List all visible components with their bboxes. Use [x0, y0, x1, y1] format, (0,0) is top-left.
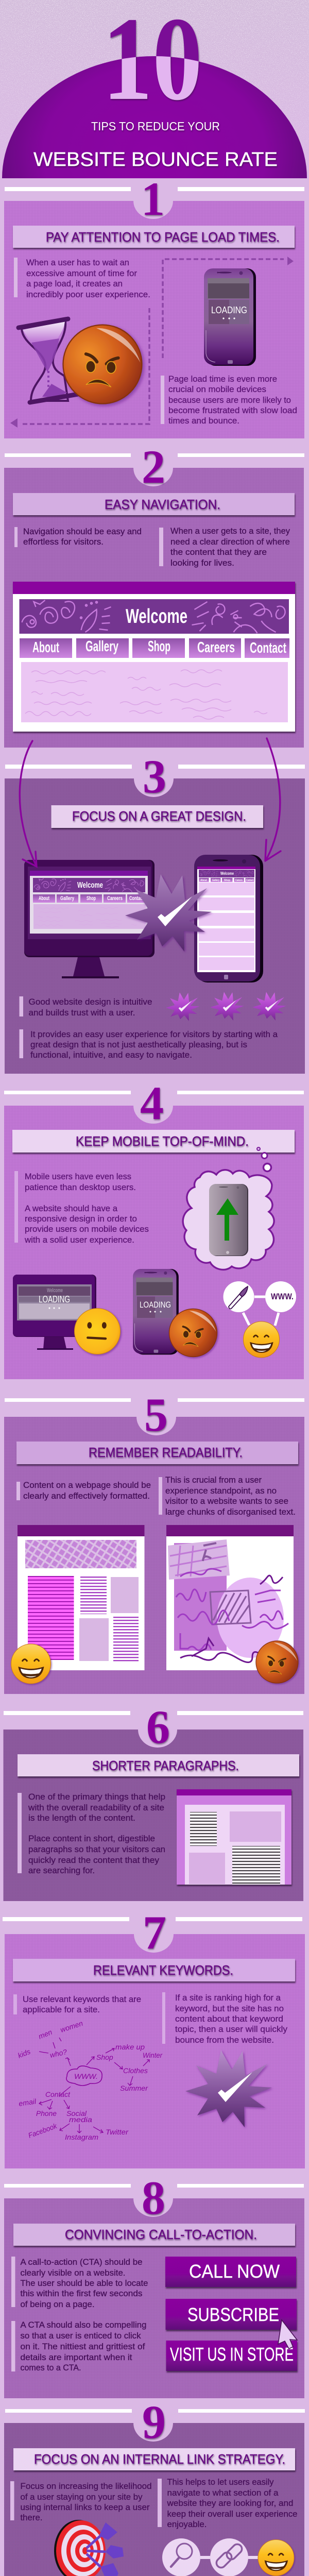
text: visible CTA: [11, 2257, 148, 2309]
text: formatting: clearly and effectively formatted.: [23, 1492, 150, 1501]
text: crucial for experience: visitor to a website wants to see: [165, 1497, 288, 1506]
icon: smiling face on page: [11, 1644, 50, 1684]
text: crucial for experience: experience standpoint, as no: [165, 1486, 277, 1496]
icon: chain link: [215, 2543, 244, 2569]
heading 5: [16, 1442, 298, 1464]
text: ranking without content: If a site is ranking high for a: [175, 1993, 281, 2003]
dividers and notch 5: [5, 1398, 304, 1402]
icon: smartphone with responsive site: [194, 855, 263, 982]
keyword mind map: kids: [16, 2047, 31, 2060]
keyword mind map: WWW.: [74, 2072, 98, 2080]
keyword mind map: media: [69, 2115, 92, 2124]
text: direction: [159, 527, 290, 568]
section 8: call to action: [4, 2172, 304, 2398]
keyword mind map: Facebook: [27, 2122, 58, 2140]
number 1: 1: [141, 173, 165, 225]
text: navigation: [14, 527, 142, 547]
section 4: mobile top of mind: [4, 1077, 304, 1379]
section 7: relevant keywords: RELEVANT KEYWORDS.: [93, 1962, 233, 1978]
text: compelling CTA: on it. The nittiest and grittiest of: [21, 2342, 145, 2351]
icon: angry face on page: [256, 1641, 298, 1683]
subtitle: TIPS TO REDUCE YOUR: [91, 120, 220, 133]
section 9: internal links: [4, 2396, 305, 2576]
text: wait time: excessive amount of time for: [26, 269, 138, 278]
icon: smartphone with responsive site: Gallery: [212, 879, 219, 882]
well organised page: [18, 1525, 144, 1670]
icon: smartphone with responsive site: Careers: [235, 879, 243, 882]
text: wait time: When a user has to wait an: [26, 258, 129, 267]
heading 4: [12, 1130, 295, 1153]
number 9: 9: [142, 2396, 166, 2448]
keyword mind map: Instagram: [65, 2133, 98, 2141]
panel 4: [4, 1106, 304, 1379]
heading 6: [18, 1754, 299, 1776]
text: internal links: of a user staying on your site by: [21, 2493, 143, 2502]
dividers and notch 6: [4, 1711, 303, 1715]
panel 2: [4, 468, 304, 748]
text: crucial for experience: This is crucial from a user: [165, 1476, 262, 1485]
icon: desktop monitor: [24, 860, 154, 978]
dividers and notch 3: [5, 765, 305, 769]
text: mobile load: because users are more likely to: [168, 396, 291, 405]
heading 9: [13, 2448, 295, 2470]
keyword mind map: who?: [49, 2047, 68, 2059]
dividers and notch 2: [5, 453, 304, 457]
text: formatting: [16, 1481, 151, 1501]
icon: desktop monitor: Gallery: [60, 895, 75, 902]
text: crucial for experience: large chunks of disorganised text.: [165, 1507, 296, 1517]
text: easy experience: It provides an easy user experience for visitors by starting with a: [30, 1030, 278, 1039]
number 4: 4: [140, 1077, 164, 1129]
design and www to smiley: [224, 1281, 296, 1358]
navigation buttons: Shop: [148, 638, 170, 655]
text: compelling CTA: [11, 2320, 146, 2372]
heading 2: [13, 493, 295, 515]
www label: WWW.: [271, 1292, 294, 1301]
navigation buttons: Gallery: [85, 638, 118, 655]
button: subscribe: SUBSCRIBE: [187, 2304, 279, 2325]
text: navigation help: enjoyable.: [167, 2520, 207, 2529]
navigation buttons: [20, 638, 289, 658]
icon: hourglass: [19, 319, 78, 402]
section 5: readability: [4, 1388, 304, 1694]
section 6: shorter paragraphs: SHORTER PARAGRAPHS.: [92, 1758, 239, 1773]
text: visible CTA: The user should be able to locate: [21, 2279, 148, 2288]
main title: WEBSITE BOUNCE RATE: [33, 149, 278, 171]
text: mobile patience: with a solid user experience.: [24, 1235, 134, 1245]
text: shorter paragraphs: are searching for.: [28, 1866, 95, 1875]
icon: desktop monitor: Shop: [87, 895, 96, 902]
content area: [21, 662, 288, 722]
text: direction: the content that they are: [170, 548, 267, 557]
dividers and notch 7: [3, 1917, 302, 1921]
text: crucial for experience: [159, 1476, 296, 1517]
icons: three check badges: [166, 992, 286, 1021]
text: shorter paragraphs: with the overall readability of a site: [28, 1803, 164, 1812]
button: call now: [165, 2257, 296, 2287]
text: ranking without content: bounce from the website.: [175, 2036, 274, 2045]
text: shorter paragraphs: [18, 1792, 165, 1875]
text: wait time: a page load, it creates an: [26, 279, 123, 289]
panel 9: [4, 2423, 304, 2576]
text: shorter paragraphs: Place content in short, digestible: [28, 1834, 155, 1843]
icon: loading phone: LOADING: [211, 305, 247, 315]
text: compelling CTA: comes to a CTA.: [21, 2363, 81, 2372]
text: ranking without content: content about that keyword: [175, 2014, 283, 2024]
text: wait time: [14, 258, 150, 299]
keyword mind map: Clothes: [123, 2066, 148, 2075]
text: compelling CTA: A CTA should also be compelling: [21, 2320, 146, 2330]
text: ranking without content: [162, 1992, 288, 2045]
text: mobile load: crucial on mobile devices: [168, 385, 266, 394]
text: navigation help: website they are looking for, and: [166, 2499, 294, 2508]
panel 3: [5, 778, 305, 1074]
text: shorter paragraphs: quickly read the content that they: [28, 1856, 160, 1865]
icon: loading desktop: LOADING: [39, 1294, 70, 1304]
text: direction: need a clear direction of where: [170, 537, 290, 547]
website mockup: [13, 582, 295, 732]
text: navigation help: keep their overall user experience: [167, 2510, 298, 2519]
section 1: page load times: [4, 173, 304, 438]
dividers and notch 9: [5, 2409, 305, 2413]
icon: smartphone with responsive site: About: [200, 879, 207, 882]
text: compelling CTA: details are important when it: [21, 2353, 132, 2362]
number 5: 5: [144, 1388, 168, 1441]
text: mobile patience: Mobile users have even less: [25, 1172, 131, 1181]
keyword mind map: men: [37, 2028, 54, 2041]
text: wait time: incredibly poor user experience.: [26, 290, 150, 299]
keyword mind map: email: [18, 2097, 37, 2108]
arrow: dashed left: [10, 308, 149, 428]
text: shorter paragraphs: One of the primary things that help: [28, 1792, 165, 1802]
banner: Welcome: [126, 605, 187, 628]
section 1: page load times: PAY ATTENTION TO PAGE LOAD TIMES.: [46, 229, 280, 245]
text: mobile patience: A website should have a: [25, 1204, 118, 1213]
text: internal links: Focus on increasing the likelihood: [21, 2482, 151, 2491]
icon: desktop monitor: Welcome: [77, 881, 103, 890]
number 6: 6: [146, 1701, 170, 1753]
text: internal links: using internal links to keep a user: [21, 2503, 150, 2512]
icon: neutral face: [74, 1309, 121, 1354]
text: direction: looking for lives.: [170, 558, 234, 568]
dividers and notch 8: [4, 2184, 304, 2188]
banner: [20, 599, 289, 634]
icon: desktop monitor: Contact: [129, 895, 144, 902]
icon: angry face small: [169, 1309, 217, 1357]
button: visit us in store: [166, 2341, 297, 2371]
number 2: 2: [142, 440, 165, 493]
panel 5: [4, 1417, 304, 1694]
keyword mind map: Twitter: [106, 2128, 129, 2136]
navigation buttons: About: [32, 639, 59, 656]
arrow: dashed right: [163, 257, 294, 358]
text: navigation help: navigate to what section of a: [167, 2488, 279, 2498]
icon: loading phone: [204, 268, 256, 366]
button: subscribe: [166, 2299, 297, 2330]
arrows: curved to devices: [20, 738, 281, 867]
keyword mind map: Phone: [36, 2109, 57, 2117]
panel 1: [4, 201, 304, 438]
header: title block: [2, 20, 307, 178]
text: mobile patience: [14, 1171, 149, 1245]
panel 8: [4, 2198, 304, 2398]
text: mobile load: times and bounce.: [168, 416, 239, 426]
text: mobile patience: responsive design in order to: [25, 1214, 137, 1224]
section 3: great design: [5, 738, 305, 1074]
icon: cursor: [278, 2320, 297, 2349]
text: navigation help: This helps to let users easily: [167, 2478, 274, 2487]
keyword mind map: Shop: [96, 2053, 113, 2061]
text: ranking without content: keyword, but the site has no: [175, 2004, 284, 2013]
keyword mind map: Contact: [45, 2090, 71, 2098]
icon: magnifier: [171, 2544, 192, 2567]
text: intuitive design: Good website design is intuitive: [29, 997, 152, 1007]
icon: loading phone small: LOADING: [140, 1300, 171, 1310]
text: visible CTA: A call-to-action (CTA) should be: [21, 2258, 142, 2267]
text: easy experience: functional, intuitive, and easy to navigate.: [30, 1050, 192, 1060]
number 7: 7: [143, 1906, 166, 1959]
heading 7: [13, 1959, 295, 1981]
keyword mind map: [16, 2019, 163, 2141]
text: direction: When a user gets to a site, they: [170, 527, 290, 536]
keyword mind map: make up: [115, 2043, 145, 2051]
text: use keywords: Use relevant keywords that are: [23, 1995, 141, 2004]
section 2: easy navigation: [4, 440, 304, 748]
text: navigation: Navigation should be easy and: [23, 527, 142, 536]
text: intuitive design: and builds trust with a user.: [29, 1008, 135, 1018]
icon: paint brush: [229, 1286, 248, 1309]
text: internal links: [10, 2481, 151, 2522]
number 3: 3: [143, 750, 166, 803]
panel 7: [5, 1934, 305, 2168]
heading 1: [13, 226, 295, 248]
panel 6: [3, 1730, 303, 1901]
section 6: shorter paragraphs: [3, 1701, 303, 1901]
header dome: [2, 56, 307, 178]
text: mobile patience: patience than desktop users.: [25, 1183, 136, 1192]
section 7: relevant keywords: [3, 1906, 305, 2168]
icon: loading desktop: Welcome: [47, 1287, 63, 1294]
section 8: call to action: CONVINCING CALL-TO-ACTION.: [65, 2227, 257, 2242]
text: internal links: there.: [21, 2513, 42, 2522]
header background speckle: [0, 0, 309, 160]
section 3: great design: FOCUS ON A GREAT DESIGN.: [72, 808, 246, 824]
search, link and smiley chain: [162, 2538, 294, 2576]
text: mobile patience: provide users on mobile devices: [25, 1225, 149, 1234]
section 2: easy navigation: EASY NAVIGATION.: [105, 497, 220, 512]
number 8: 8: [142, 2172, 165, 2224]
icon: check badge: [185, 2050, 272, 2127]
text: visible CTA: this within the first few seconds: [21, 2289, 142, 2298]
text: easy experience: great design that is not just aesthetically pleasing, but is: [30, 1040, 247, 1049]
navigation buttons: Careers: [197, 639, 235, 656]
text: easy experience: [20, 1029, 278, 1060]
section 9: internal links: FOCUS ON AN INTERNAL LINK STRATEGY.: [34, 2451, 285, 2467]
page layout mockup: [177, 1789, 291, 1885]
dividers and notch 1: [5, 187, 304, 191]
section 5: readability: REMEMBER READABILITY.: [89, 1445, 243, 1460]
icon: smiling face happy: [258, 2540, 294, 2576]
icon: smiling face: [243, 1321, 279, 1358]
text: ranking without content: topic, then a user will quickly: [175, 2025, 288, 2034]
keyword mind map: Summer: [120, 2084, 148, 2092]
icon: angry face: [63, 325, 142, 404]
section 4: mobile top of mind: KEEP MOBILE TOP-OF-MIND.: [76, 1133, 249, 1149]
keyword mind map: Winter: [143, 2051, 163, 2059]
text: visible CTA: clearly visible on a website.: [21, 2268, 126, 2278]
button: call now: CALL NOW: [189, 2261, 280, 2282]
text: shorter paragraphs: paragraphs so that your visitors can: [28, 1845, 165, 1854]
text: use keywords: [13, 1994, 141, 2014]
text: intuitive design: [20, 996, 152, 1018]
text: mobile load: Page load time is even more: [168, 375, 277, 384]
disorganised page: [166, 1525, 294, 1670]
icon: desktop monitor: Careers: [107, 895, 123, 902]
text: navigation help: [158, 2478, 298, 2529]
heading 3: [52, 805, 263, 828]
text: formatting: Content on a webpage should be: [23, 1481, 151, 1490]
text: mobile load: become frustrated with slow load: [168, 406, 297, 415]
keyword mind map: women: [59, 2019, 84, 2034]
text: mobile load: [161, 375, 297, 426]
icon: smartphone with responsive site: Welcome: [220, 871, 234, 876]
text: use keywords: applicable for a site.: [23, 2005, 100, 2014]
icon: loading desktop: [13, 1275, 96, 1350]
icon: check badge large: [125, 874, 212, 952]
text: navigation: effortless for visitors.: [23, 537, 104, 547]
heading 8: [13, 2224, 295, 2246]
thought bubble with mobile up arrow: [183, 1147, 274, 1269]
text: shorter paragraphs: is the length of the content.: [28, 1814, 135, 1823]
icon: loading phone small: [133, 1269, 179, 1354]
icon: smartphone with responsive site: Shop: [224, 879, 230, 882]
icon: target with darts: [54, 2520, 124, 2576]
dividers and notch 4: [4, 1091, 304, 1094]
text: compelling CTA: so that a user is enticed to click: [21, 2331, 141, 2341]
keyword mind map: Social: [66, 2109, 87, 2117]
text: visible CTA: of being on a page.: [21, 2300, 95, 2309]
navigation buttons: Contact: [250, 640, 286, 656]
icon: smartphone with responsive site: Contact: [246, 879, 253, 882]
icon: desktop monitor: About: [39, 895, 49, 902]
